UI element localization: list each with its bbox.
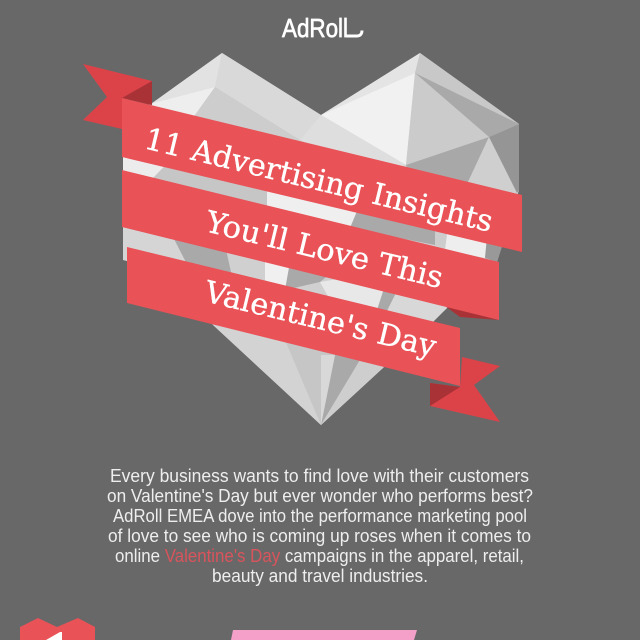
ribbon: line three: Valentine's Day (200, 275, 440, 365)
icon: faceted heart (123, 53, 519, 425)
intro text block: on Valentine's Day but ever wonder who performs best? (107, 486, 533, 506)
ribbon: line three (127, 247, 460, 386)
banner: pink heading (231, 630, 417, 640)
intro text block: AdRoll EMEA dove into the performance marketing pool (113, 506, 527, 526)
intro text block: beauty and travel industries. (212, 566, 428, 586)
intro text block: Every business wants to find love with their customers (110, 466, 529, 486)
intro text block: online Valentine's Day campaigns in the apparel, retail, (115, 546, 524, 566)
left ribbon tail (83, 64, 152, 129)
right ribbon tail (430, 357, 500, 422)
logo: AdRoll: AdRoll (282, 13, 348, 43)
ribbon fold shadow (445, 306, 499, 320)
ribbon: line one (122, 98, 522, 252)
badge: number one heart (20, 618, 95, 640)
ribbon: line two (122, 170, 499, 320)
intro text block: of love to see who is coming up roses when it comes to (108, 526, 531, 546)
ribbon: line two: You'll Love This (201, 205, 447, 296)
intro text block (107, 466, 533, 586)
ribbon: line one: 11 Advertising Insights (141, 122, 496, 240)
